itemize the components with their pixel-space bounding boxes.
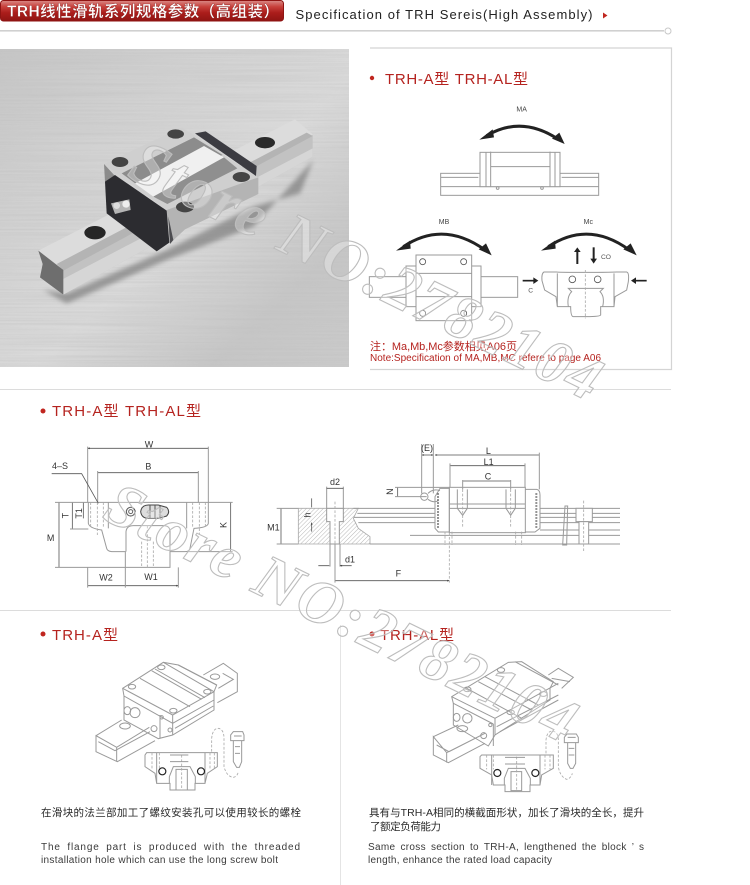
dimension labels: W2: [99, 573, 113, 583]
photo shadow: [43, 160, 313, 303]
hatched rail section: [298, 508, 370, 544]
diagram: Mc moment with cross section: Mc: [584, 219, 593, 226]
dimension labels: T1: [74, 508, 84, 519]
photo: carriage block: [104, 127, 258, 251]
dimension labels: M: [47, 533, 54, 543]
text: English description: length, enhance the rated load capacity: [368, 855, 552, 866]
diagram: MB moment: MB: [439, 219, 450, 226]
icon: red triangle pointer: [603, 12, 608, 18]
outline: carriage and rail section: [88, 502, 208, 567]
diagram: Mc moment with cross section: C: [528, 288, 533, 295]
photo: guide rail: [38, 119, 313, 295]
heading: TRH-A TRH-AL: TRH-A型 TRH-AL型: [385, 71, 528, 88]
dimension labels: T: [61, 512, 71, 518]
dimension labels: L1: [484, 457, 494, 467]
dimension labels: K: [219, 522, 229, 528]
dimension labels: W1: [144, 572, 158, 582]
text: Chinese description: 了额定负荷能力: [370, 820, 441, 833]
counterbore hole: [327, 487, 343, 567]
dimension labels: F: [396, 569, 402, 579]
dimension labels: W: [145, 439, 154, 449]
diagram: MA moment: [441, 107, 599, 195]
panel: moment diagrams: [369, 48, 672, 370]
illustration: TRH-A isometric with cross section: [96, 662, 244, 790]
diagram: MB moment: [369, 219, 518, 321]
text: Chinese description: 在滑块的法兰部加工了螺纹安装孔可以使用较长的螺栓: [41, 806, 302, 819]
text: English description: installation hole which can use the long screw bolt: [41, 855, 278, 866]
dimension drawing: front section: [47, 439, 233, 588]
diagram: MA moment: MA: [516, 107, 527, 114]
text: Chinese description: 具有与TRH-A相同的横截面形状，加长了滑块的全长，提升: [369, 806, 644, 819]
dimension labels: L: [486, 446, 491, 456]
dimension labels: C: [485, 472, 492, 482]
dimension lines: [277, 444, 539, 583]
dimension labels: M1: [267, 522, 280, 532]
carriage block: [421, 487, 540, 545]
heading: TRH-A: TRH-A型: [52, 627, 118, 644]
dimension labels: N: [385, 488, 395, 495]
illustration: TRH-AL isometric with cross section: [433, 662, 578, 792]
panel: TRH-AL: [368, 627, 644, 866]
note text: [370, 339, 601, 364]
dimension labels: d2: [330, 477, 340, 487]
dimension labels: B: [145, 462, 151, 472]
product photo: linear guide on brushed steel: [0, 49, 349, 367]
panel: TRH-A: [40, 627, 302, 866]
header button: Chinese title: TRH线性滑轨系列规格参数（高组装）: [7, 2, 279, 20]
text: English description: [41, 842, 300, 866]
dimension drawing: side section: [267, 443, 620, 583]
rail lines: [353, 508, 620, 544]
watermark: upper store number: Store NO:2782104: [120, 127, 613, 414]
dimension labels: d1: [345, 555, 355, 565]
diagram: Mc moment with cross section: [523, 219, 647, 318]
header: English title: Specification of TRH Sereis(High Assembly): [296, 7, 592, 22]
dimension lines: [52, 447, 233, 588]
far-end rail hole and tie: [563, 501, 592, 552]
text: English description: The flange part is produced with the threaded: [41, 842, 300, 853]
dimension labels: 4–S: [52, 461, 68, 471]
heading: TRH-AL: TRH-AL型: [380, 627, 454, 644]
heading: section dimensions: TRH-A型 TRH-AL型: [52, 403, 201, 420]
note text: Note:Specification of MA,MB,MC refere to page A06: [370, 353, 601, 364]
dimension labels: h: [303, 512, 313, 517]
text: English description: [368, 842, 644, 866]
grease nipple and screw: [126, 505, 169, 518]
page header: [0, 0, 671, 34]
watermark: lower store number: Store NO:2782104: [95, 469, 588, 756]
dimension labels: [267, 443, 494, 579]
note text: 注：Ma,Mb,Mc参数相见A06页: [370, 339, 517, 353]
text: English description: Same cross section to TRH-A, lengthened the block ’ s: [368, 842, 644, 853]
diagram: Mc moment with cross section: CO: [601, 254, 611, 261]
dimension labels: (E): [421, 443, 433, 453]
dimension labels: [47, 439, 229, 583]
text: Chinese description: [369, 806, 644, 833]
